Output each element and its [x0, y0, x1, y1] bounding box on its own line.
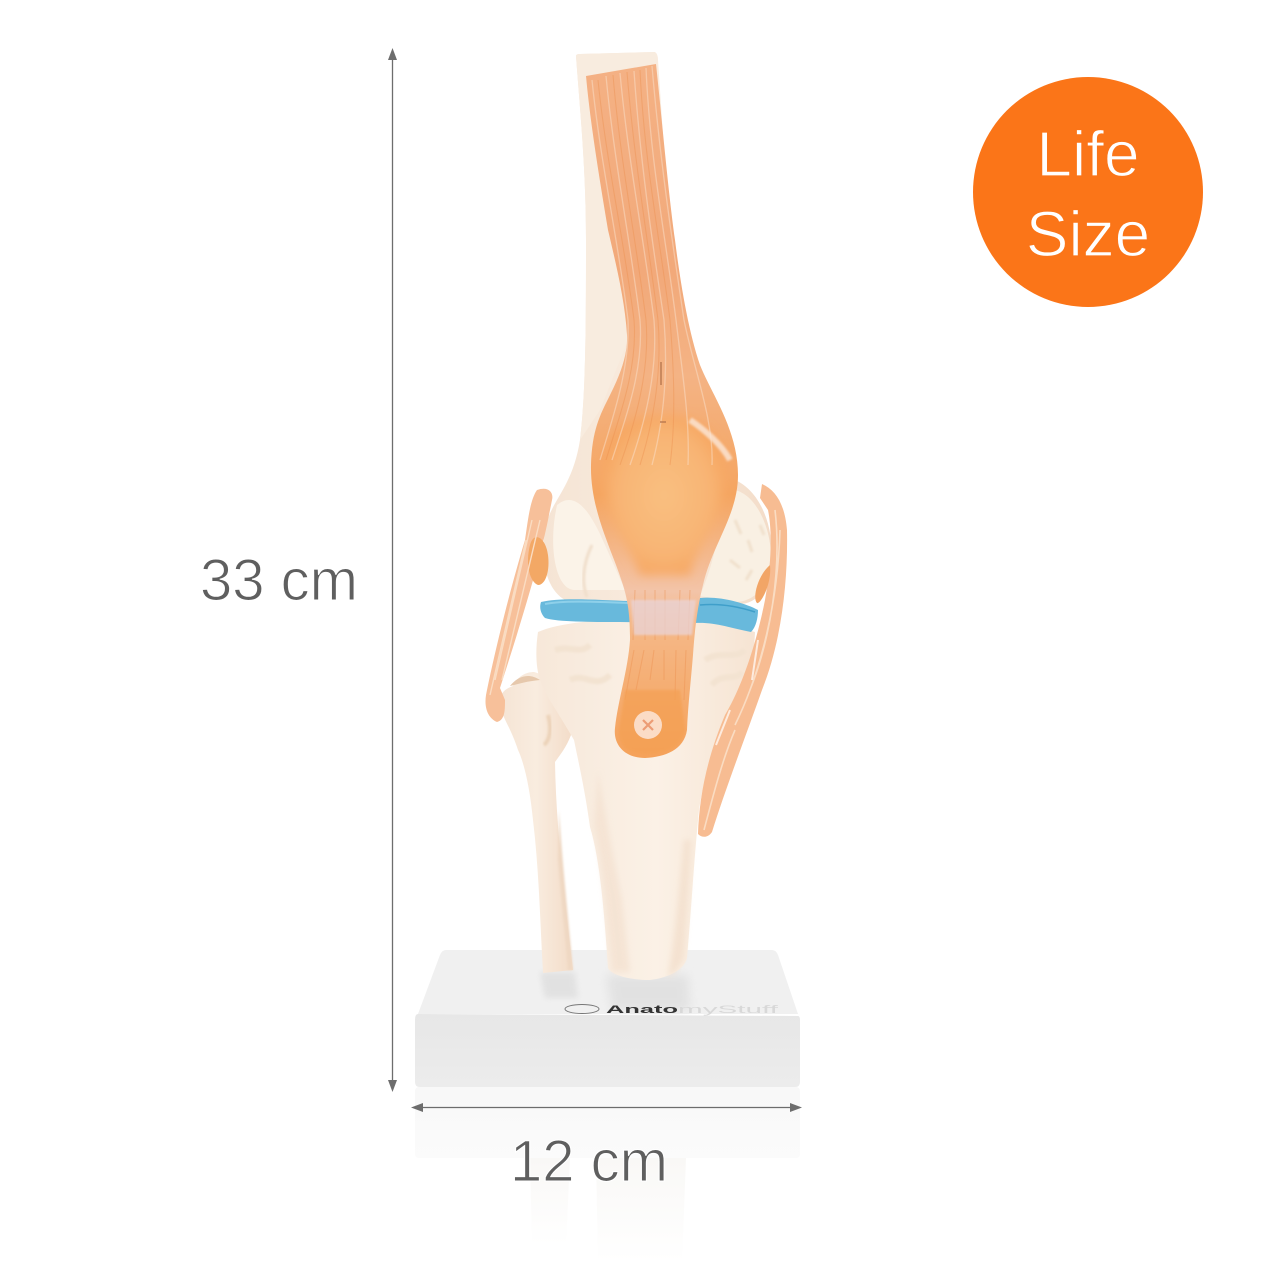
tibial texture [555, 645, 745, 685]
base logo [565, 1004, 781, 1016]
base front face [415, 1014, 800, 1087]
tendon sheen over meniscus [631, 600, 696, 635]
width label: 12 cm [510, 1129, 668, 1194]
life size badge [973, 77, 1203, 307]
muscle fibres: orange streaks [598, 70, 690, 700]
display base [415, 950, 800, 1087]
screw [634, 711, 662, 739]
base top face [418, 950, 798, 1014]
base reflection [415, 1087, 800, 1262]
femur shaft and condyles [544, 52, 772, 604]
meniscus [540, 598, 758, 632]
medial collateral ligament [485, 489, 552, 722]
height label: 33 cm [200, 548, 358, 613]
pale highlight on patella [690, 420, 730, 460]
width dimension arrow [411, 1103, 802, 1112]
life size badge: Size [1026, 198, 1150, 270]
base logo: Anato [606, 1004, 679, 1016]
quadriceps tendon and patella [586, 64, 738, 758]
lateral collateral ligament [698, 484, 787, 837]
base logo: myStuff [678, 1004, 781, 1016]
life size badge: Life [1036, 118, 1140, 190]
muscle fibres: pale streaks [592, 66, 712, 465]
tibial tab darker [619, 690, 685, 754]
medial condyle shading [553, 500, 625, 590]
patella glow [603, 415, 725, 575]
tibia [536, 618, 755, 980]
fibula [499, 672, 573, 973]
height dimension arrow [388, 48, 397, 1092]
knee model [485, 52, 787, 980]
lateral condyle texture [700, 490, 771, 602]
small dark marks on tendon [660, 362, 666, 422]
